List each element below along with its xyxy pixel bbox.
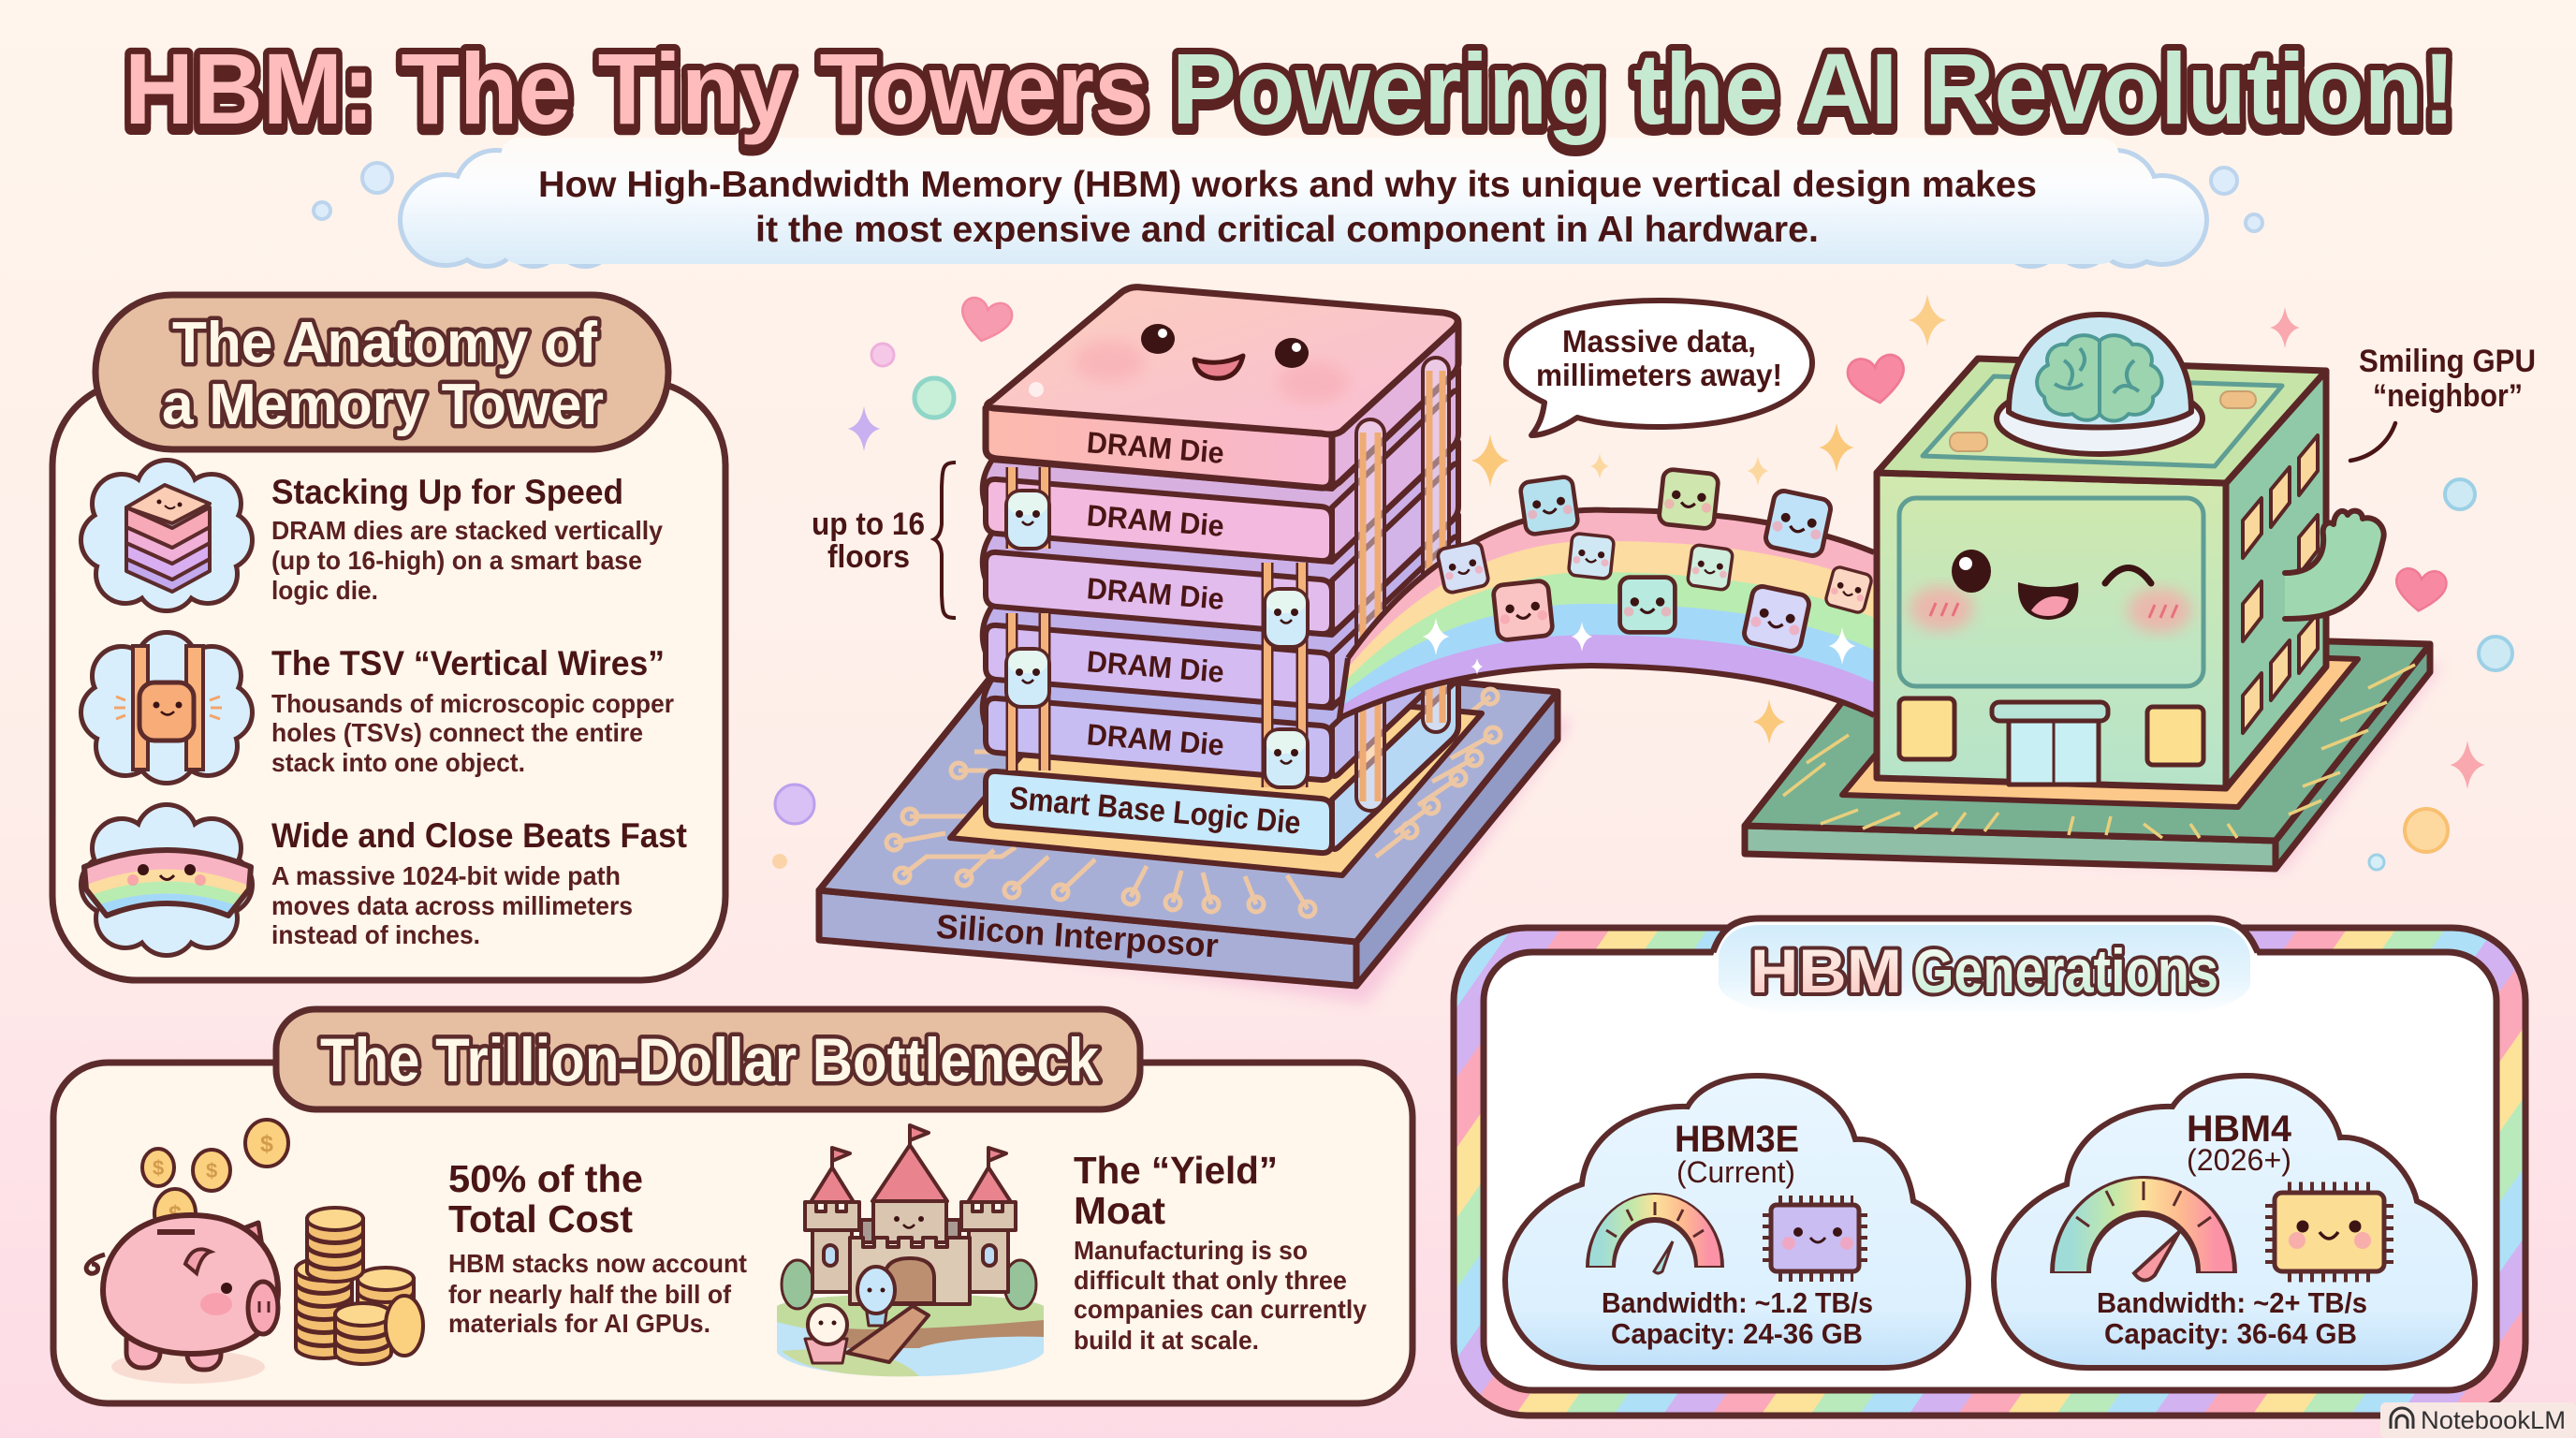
data cubes [1437,469,1873,653]
heading badge [276,1009,1140,1109]
heading badge: a Memory Tower [162,373,604,437]
GPU neighbor callout: Smiling GPU [2359,344,2536,379]
yield moat text [1074,1149,1367,1355]
up to 16 floors label: up to 16 [812,506,925,542]
illustration: piggy bank and coins [86,1120,423,1384]
illustration: piggy bank and coins: $ [206,1159,217,1182]
illustration: piggy bank and coins: $ [260,1131,273,1157]
illustration: piggy bank and coins: $ [168,1201,182,1227]
item: wide and close beats fast: Wide and Close Beats Fast [271,816,687,855]
gauge [1601,1202,1709,1273]
speech bubble [1506,301,1812,435]
rainbow data bridge [1339,469,1874,718]
yield moat text: The “Yield” [1074,1149,1278,1192]
DRAM die 2 [983,369,1458,561]
piggy tail [86,1255,105,1273]
left decorations [772,296,1015,869]
coin stacks [296,1208,423,1364]
piggy ear [234,1223,265,1264]
item: stacking up for speed: Stacking Up for Speed [271,473,623,511]
base logic die [986,682,1458,853]
title: HBM: The Tiny Towers [124,32,1148,145]
chip [2270,1187,2389,1277]
right face [2226,371,2326,788]
yield moat text: Moat [1074,1189,1165,1232]
panel body [53,1063,1412,1403]
screen panel [1899,498,2203,686]
yield moat text: companies can currently [1074,1295,1367,1324]
left TSV pillar, lower segment [1012,613,1045,770]
side windows [2243,435,2318,733]
castle [805,1125,1016,1362]
item: wide and close beats fast: moves data across millimeters [271,891,633,920]
TSV marshmallow buddies [1006,491,1308,787]
icon: copper TSV [83,635,250,781]
speech bubble: Massive data, [1562,324,1756,359]
yield moat text: difficult that only three [1074,1266,1347,1295]
50% of total cost text: 50% of the [448,1157,643,1200]
right TSV pillar [1267,563,1302,787]
circuit traces [886,689,1500,917]
circuit board under GPU [1745,629,2443,871]
card: HBM4: Bandwidth: ~2+ TB/s [2097,1286,2367,1319]
item: TSV vertical wires: holes (TSVs) connect the entire [271,718,643,747]
item: TSV vertical wires [83,635,674,781]
decorative bubbles near header [314,163,2262,231]
panel body [52,381,725,980]
up to 16 floors label: floors [827,539,910,575]
item: stacking up for speed: (up to 16-high) on a smart base [271,546,642,575]
panel: trillion-dollar bottleneck [53,1009,1412,1403]
right decorations [1471,294,2512,870]
ground windows and door [1899,698,2203,785]
item: stacking up for speed: DRAM dies are stacked vertically [271,516,663,545]
item: TSV vertical wires: stack into one object. [271,748,525,777]
title: Powering the AI Revolution! [1172,32,2455,145]
white inner panel [1484,952,2496,1390]
NotebookLM watermark [2380,1402,2576,1438]
piggy legs [126,1325,221,1370]
50% of total cost text: HBM stacks now account [448,1249,747,1278]
DRAM die 4 [983,515,1458,707]
NotebookLM watermark: NotebookLM [2421,1406,2566,1434]
icon: rainbow cloud [78,807,256,953]
island base [777,1260,1044,1376]
title: HBM: The Tiny Towers [124,37,1148,150]
top face [1877,359,2326,483]
panel: HBM generations [1454,918,2525,1416]
subtitle: it the most expensive and critical component in AI hardware. [755,210,1819,250]
illustration: piggy bank and coins: $ [153,1156,164,1180]
heading badge: The Trillion-Dollar Bottleneck [320,1025,1099,1094]
HBM tower [983,287,1458,853]
item: wide and close beats fast: instead of inches. [271,920,480,949]
card: HBM4 [1994,1076,2475,1368]
speech bubble: millimeters away! [1536,358,1782,392]
silicon interposer [819,640,1573,1004]
header cloud [402,138,2204,264]
card: HBM4: (2026+) [2187,1143,2291,1177]
DRAM die 1 with face: DRAM Die [1086,425,1225,470]
item: wide and close beats fast: A massive 1024-bit wide path [271,861,621,890]
DRAM die 2: DRAM Die [1086,498,1225,543]
icon: stacked dies [83,462,250,609]
50% of total cost text: Total Cost [448,1197,633,1240]
heading tab: HBM [1750,936,1902,1005]
item: TSV vertical wires: Thousands of microscopic copper [271,689,674,718]
card: HBM3E: Bandwidth: ~1.2 TB/s [1602,1286,1873,1319]
item: stacking up for speed: logic die. [271,576,378,605]
card: HBM3E [1505,1076,1969,1368]
tower face [1029,324,1349,403]
heading tab [1713,918,2258,1017]
gauge [2071,1181,2217,1281]
chip [1767,1200,1863,1277]
50% of total cost text: for nearly half the bill of [448,1280,732,1309]
DRAM die 5: DRAM Die [1086,717,1225,762]
base logic die: Smart Base Logic Die [1008,781,1302,842]
GPU face [1910,550,2191,633]
DRAM die 1 with face [986,287,1458,488]
yield moat text: build it at scale. [1074,1326,1259,1355]
heading badge [95,295,668,449]
card: HBM3E: Capacity: 24-36 GB [1611,1317,1863,1350]
illustration: castle and moat [777,1125,1044,1376]
card: HBM4: HBM4 [2187,1108,2292,1150]
silicon interposer: Silicon Interposor [935,907,1220,965]
50% of total cost text [448,1157,747,1338]
piggy body [103,1215,278,1354]
item: stacking up for speed [83,462,663,609]
GPU neighbor callout [2350,344,2536,461]
subtitle: How High-Bandwidth Memory (HBM) works and why its unique vertical design makes [538,165,2037,205]
card: HBM3E: HBM3E [1675,1119,1799,1160]
item: wide and close beats fast [78,807,687,953]
side TSV tubes [1356,358,1449,811]
sparkles on bridge [1423,618,1855,675]
waving arm [2285,511,2384,619]
DRAM die 3: DRAM Die [1086,571,1225,616]
rainbow frame [1454,928,2525,1416]
GPU neighbor callout: “neighbor” [2373,378,2523,414]
front face [1877,473,2226,788]
heading badge: The Anatomy of [172,311,597,375]
card: HBM4: Capacity: 36-64 GB [2104,1317,2357,1350]
DRAM die 5 [983,588,1458,780]
50% of total cost text: materials for AI GPUs. [448,1309,710,1338]
up to 16 floors label [812,462,956,618]
DRAM die 4: DRAM Die [1086,644,1225,689]
item: TSV vertical wires: The TSV “Vertical Wires” [271,644,665,682]
card: HBM3E: (Current) [1676,1155,1795,1189]
panel: anatomy of a memory tower [52,295,725,980]
heading tab: Generations [1913,936,2218,1005]
glass dome with brain [1997,315,2203,454]
subtitle [538,165,2037,250]
castle characters [805,1267,895,1363]
yield moat text: Manufacturing is so [1074,1236,1308,1265]
DRAM die 3 [983,442,1458,634]
title: Powering the AI Revolution! [1172,37,2455,150]
title [124,32,2455,150]
GPU building [1877,315,2384,788]
falling coins [142,1120,288,1238]
left TSV pillar, upper segment [1012,467,1045,549]
orange mounting pad [950,676,1482,875]
